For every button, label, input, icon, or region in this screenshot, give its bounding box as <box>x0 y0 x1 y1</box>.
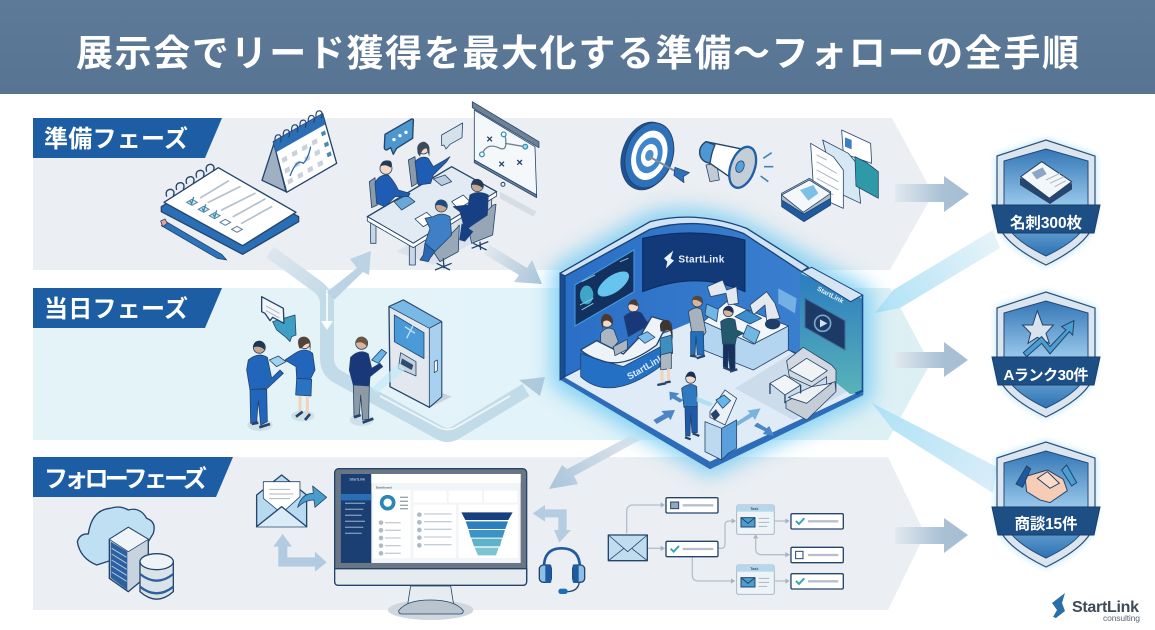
back walls <box>560 219 802 380</box>
phase label: 当日フェーズ: 当日フェーズ <box>44 295 188 323</box>
envelope node <box>608 535 647 561</box>
band: 当日フェーズ <box>33 288 930 440</box>
icon: logo mark <box>1052 593 1065 618</box>
icon: megaphone <box>700 142 773 191</box>
icon: target <box>612 115 689 197</box>
logo: consulting <box>1103 613 1140 623</box>
visitor woman <box>657 320 673 385</box>
phase label: フォローフェーズ: フォローフェーズ <box>44 465 207 493</box>
monitor <box>335 469 527 620</box>
phase label: 準備フェーズ: 準備フェーズ <box>44 125 188 153</box>
right tower: StartLink <box>816 286 845 305</box>
icon: speech bubble text <box>442 123 463 149</box>
floor kiosk <box>705 390 737 460</box>
icon: headset <box>539 548 585 594</box>
device kiosk <box>372 300 452 407</box>
icon: business cards <box>1020 162 1072 204</box>
icon: documents <box>782 130 878 222</box>
準備 icons (notebook, calendar, meeting) <box>161 102 539 270</box>
icon: server <box>109 527 148 592</box>
person 4 (front) <box>433 225 459 262</box>
phase label: フォローフェーズ <box>33 457 233 497</box>
icon: notebook checklist <box>161 164 299 254</box>
arrow: envelope to monitor <box>273 534 327 572</box>
icon: meeting table and people <box>367 142 497 270</box>
woman with tablet <box>285 337 315 421</box>
dashboard screen: Dashboard <box>376 485 392 489</box>
task card 2 <box>737 565 774 594</box>
title bar <box>0 0 1155 94</box>
visitor navy <box>721 306 744 372</box>
person 3 (right back) <box>468 204 496 243</box>
icon: chat bubbles <box>262 297 296 342</box>
title: 展示会でリード獲得を最大化する準備〜フォローの全手順 <box>76 33 1079 74</box>
icon: projector screen <box>472 102 539 217</box>
準備 icons (target, megaphone, documents) <box>612 115 878 222</box>
フォロー icons left <box>77 475 327 599</box>
phase label: 当日フェーズ <box>33 288 222 328</box>
shield: Aランク30件 <box>992 292 1100 417</box>
icon: envelope <box>257 475 327 527</box>
icon: cloud <box>77 507 154 565</box>
task card 2: Task <box>750 567 759 571</box>
center curved screen: StartLink <box>678 255 725 266</box>
dashboard screen: StartLink <box>349 477 365 482</box>
floor <box>561 321 862 465</box>
center curved screen <box>643 233 745 292</box>
man at kiosk <box>349 337 387 426</box>
task card 1: Task <box>750 507 759 511</box>
booth <box>560 217 863 469</box>
reception desk <box>581 299 668 388</box>
phase label: 準備フェーズ <box>33 118 222 158</box>
visitor grey <box>688 296 706 358</box>
flow arrow: preparation to day path <box>270 252 545 435</box>
node boxes <box>666 498 843 589</box>
label: 名刺300枚 <box>1010 213 1082 232</box>
floor arrows and guide <box>653 392 774 436</box>
sofa set <box>770 347 836 420</box>
icon: handshake <box>1016 465 1077 503</box>
follow right: arrows, headset, workflow <box>533 498 843 594</box>
guide person <box>682 372 713 439</box>
arrow: monitor to headset <box>533 505 571 543</box>
icon: calendar <box>262 111 337 192</box>
beam: booth to 商談 <box>872 403 997 493</box>
person back left chair <box>369 178 377 208</box>
shield: 商談15件 <box>992 442 1100 567</box>
workflow diagram <box>608 498 843 594</box>
logo: StartLink <box>1072 599 1139 616</box>
logo <box>1052 593 1140 623</box>
band: フォローフェーズ <box>33 457 925 610</box>
result arrow 2 <box>895 342 968 377</box>
icon: database <box>140 554 173 599</box>
label: Aランク30件 <box>1004 367 1088 384</box>
label: 商談15件 <box>1014 515 1078 533</box>
result arrow 3 <box>895 518 968 553</box>
flow arrow: booth to monitor <box>549 436 640 489</box>
person 1 <box>380 162 392 174</box>
dashboard screen <box>341 474 521 563</box>
booth glow <box>560 218 863 467</box>
robot table <box>703 280 797 370</box>
result arrow 1 <box>895 176 969 212</box>
task card 1 <box>737 505 774 534</box>
band: 準備フェーズ <box>33 118 933 270</box>
icon: speech bubble dots <box>384 119 413 154</box>
person 2 <box>418 143 429 154</box>
right tower <box>800 267 863 395</box>
flow arrow: meeting to booth <box>484 245 542 284</box>
icon: pencil <box>161 219 227 260</box>
icon: star and trend <box>1023 311 1074 357</box>
left screen <box>575 250 634 326</box>
flow arrow: to meeting <box>327 251 371 300</box>
man with tablet <box>247 341 286 431</box>
receptionist back <box>601 316 613 327</box>
reception desk: StartLink <box>625 352 666 382</box>
beam: booth to 名刺 <box>875 230 1000 313</box>
当日 icons <box>247 297 452 431</box>
shield: 名刺300枚 <box>992 140 1100 265</box>
